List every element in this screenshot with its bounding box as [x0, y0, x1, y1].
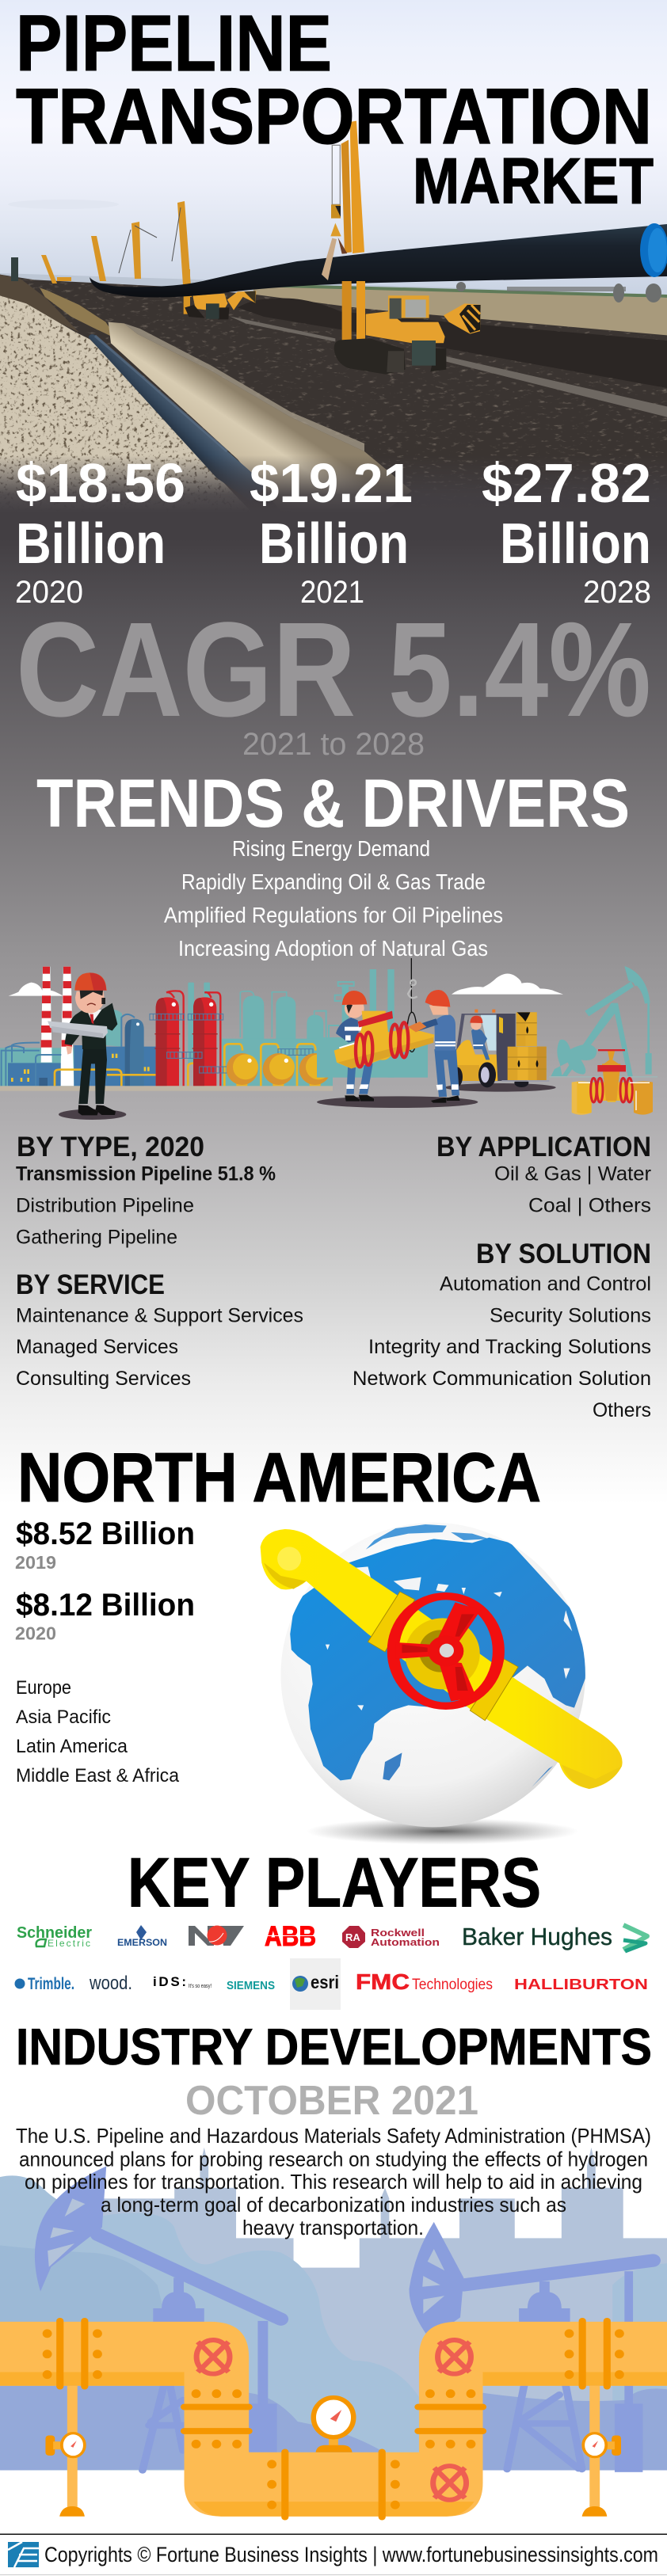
- hills: [0, 2175, 425, 2471]
- yellow pipeline: [0, 2322, 667, 2517]
- other regions list: Middle East & Africa: [16, 1765, 180, 1786]
- trench pipe: [89, 334, 267, 501]
- stat 2021: [250, 452, 413, 610]
- title: [16, 0, 654, 217]
- spheres: [227, 1053, 331, 1086]
- regional values: [15, 1516, 195, 1644]
- logo: Trimble: Trimble.: [28, 1975, 74, 1993]
- segment: by application: [436, 1132, 651, 1216]
- icon: Fortune Business Insights logo: [8, 2542, 39, 2567]
- logo: iDS: [153, 1974, 212, 1989]
- gravel bank: [0, 295, 261, 523]
- segment: by solution: Automation and Control: [440, 1273, 651, 1296]
- yellow pipe: [261, 1529, 623, 1789]
- regional values: $8.12 Billion: [16, 1588, 195, 1623]
- logo: Wood: wood.: [89, 1973, 132, 1994]
- logo: Rockwell Automation: Rockwell: [371, 1927, 425, 1939]
- other regions list: Europe: [16, 1677, 71, 1699]
- logo: FMC Technologies: Technologies: [412, 1977, 493, 1993]
- red valves: [196, 2340, 471, 2500]
- pipe blue end cap: [640, 223, 667, 277]
- main above-ground pipeline: [90, 224, 667, 298]
- flanges: [368, 1592, 518, 1721]
- segment: by solution: Others: [593, 1399, 651, 1421]
- stems and small gauges: [45, 2386, 621, 2517]
- segment: by type: [16, 1132, 276, 1248]
- segment: by solution: Security Solutions: [490, 1305, 651, 1327]
- trench wall: [109, 322, 412, 523]
- heading: north america: NORTH AMERICA: [17, 1438, 541, 1516]
- teal background structures: [0, 983, 333, 1086]
- pumpjack right: [410, 2222, 653, 2472]
- logos: [14, 1921, 648, 2010]
- logo: Esri: [290, 1958, 341, 2010]
- development text: a long-term goal of decarbonization industries such as: [101, 2193, 566, 2216]
- distant excavators: [41, 201, 192, 297]
- logo: Emerson: EMERSON: [117, 1937, 167, 1948]
- illustration: refinery left with engineer: [0, 967, 333, 1120]
- regional values: $8.52 Billion: [16, 1516, 195, 1551]
- illustration: pipeline and pumpjacks: [0, 2148, 667, 2517]
- stat 2020: [15, 452, 185, 610]
- railings: [150, 1014, 313, 1073]
- market size values: [15, 452, 651, 610]
- segment: by type: Transmission Pipeline 51.8 %: [16, 1162, 276, 1185]
- engineer: [48, 972, 126, 1120]
- logo: Halliburton: HALLIBURTON: [514, 1977, 648, 1992]
- segment: by application: Coal | Others: [528, 1194, 651, 1216]
- segment: by type: Distribution Pipeline: [16, 1194, 194, 1216]
- second pipelayer: [184, 269, 256, 319]
- worker one shadow: [317, 1096, 478, 1108]
- dry grass: [40, 287, 117, 339]
- worker two: [408, 990, 460, 1103]
- logo: Schneider Electric: Schneider: [17, 1924, 92, 1942]
- stat 2028: 2028: [583, 575, 651, 610]
- segment: by solution: Network Communication Solution: [353, 1368, 651, 1390]
- red tanks: [166, 991, 220, 1086]
- blue plant: [8, 1063, 61, 1086]
- logo: Emerson: [117, 1925, 167, 1948]
- logo: FMC Technologies: FMC: [356, 1969, 410, 1994]
- logo: NOV: [189, 1926, 244, 1946]
- illustration: workers with valve, forklift, pumpjack: [317, 958, 657, 1115]
- logo: Baker Hughes: Baker Hughes: [462, 1923, 612, 1950]
- forklift: [445, 1014, 556, 1092]
- fade into dark: [0, 455, 667, 527]
- stat 2020: $18.56: [16, 452, 185, 514]
- valve foreground right: [572, 1049, 653, 1115]
- stat 2020: Billion: [16, 512, 166, 576]
- drivers list: Rapidly Expanding Oil & Gas Trade: [181, 869, 486, 894]
- panel: construction photo: [0, 0, 667, 527]
- center gauge: [314, 2398, 353, 2452]
- drivers list: Rising Energy Demand: [232, 836, 430, 861]
- regional values: 2020: [15, 1623, 56, 1644]
- yellow pipes: [55, 1044, 315, 1086]
- logo: Rockwell Automation: Automation: [371, 1936, 440, 1948]
- date: OCTOBER 2021: [185, 2078, 478, 2124]
- segment: by type: BY TYPE, 2020: [17, 1132, 204, 1162]
- ground strip: [0, 1086, 333, 1091]
- far trees: [456, 282, 661, 302]
- pumpjack: [549, 966, 657, 1078]
- yellow valve assembly: [334, 1011, 434, 1068]
- main pipelayer: [322, 121, 481, 375]
- valve hub: [405, 1618, 480, 1689]
- segment: by service: [16, 1269, 303, 1390]
- segment: by service: BY SERVICE: [16, 1269, 165, 1300]
- development text: [16, 2124, 651, 2239]
- ground: soil, gravel, trench: [0, 275, 667, 523]
- logo: Esri: esri: [311, 1972, 339, 1992]
- stat 2021: 2021: [300, 575, 364, 610]
- logo: Trimble: [14, 1975, 74, 1993]
- drivers list: Amplified Regulations for Oil Pipelines: [164, 903, 503, 927]
- cloud: [9, 983, 63, 996]
- drivers list: Increasing Adoption of Natural Gas: [178, 936, 488, 961]
- development text: on pipelines for transportation. This research will help to aid in achieving: [25, 2170, 642, 2194]
- regional values: 2019: [15, 1552, 56, 1573]
- hook: [407, 958, 417, 1052]
- segment: by solution: BY SOLUTION: [476, 1239, 651, 1269]
- logo: Schneider Electric: Electric: [48, 1938, 90, 1949]
- cloud: [452, 974, 563, 995]
- logo: ABB: ABB: [265, 1921, 316, 1952]
- upper left bank: [0, 275, 79, 333]
- segment: by service: Managed Services: [16, 1336, 178, 1358]
- logo: iDS: iDS:: [153, 1974, 186, 1989]
- logo: Rockwell Automation: RA: [345, 1931, 360, 1943]
- worker one: [336, 991, 374, 1102]
- logo: Siemens: SIEMENS: [227, 1979, 275, 1992]
- heading: key players: KEY PLAYERS: [128, 1844, 541, 1921]
- segment: by solution: [353, 1239, 651, 1421]
- stat 2021: $19.21: [250, 452, 413, 514]
- other regions list: Latin America: [16, 1736, 128, 1757]
- city silhouette: [0, 2148, 667, 2471]
- red wheel: [393, 1596, 498, 1706]
- segment: by solution: Integrity and Tracking Solutions: [368, 1336, 651, 1358]
- chimneys: [41, 967, 52, 1063]
- segment: by type: Gathering Pipeline: [16, 1226, 177, 1248]
- segment: by service: Consulting Services: [16, 1368, 191, 1390]
- CAGR period: 2021 to 2028: [242, 727, 425, 762]
- logo: FMC Technologies: [356, 1969, 493, 1994]
- barrels: [475, 1010, 547, 1080]
- stat 2021: Billion: [259, 512, 409, 576]
- drivers list: [164, 836, 503, 961]
- pumpjack left: [35, 2166, 280, 2471]
- segment: by service: Maintenance & Support Services: [16, 1305, 303, 1327]
- segment: by application: Oil & Gas | Water: [494, 1162, 651, 1185]
- segment: by application: BY APPLICATION: [436, 1132, 651, 1162]
- stat 2020: 2020: [15, 575, 83, 610]
- other regions list: [16, 1677, 180, 1786]
- footer: [0, 2522, 667, 2576]
- other regions list: Asia Pacific: [16, 1707, 111, 1728]
- development text: heavy transportation.: [242, 2216, 424, 2239]
- logo: Rockwell Automation: [342, 1926, 440, 1948]
- stat 2028: [482, 452, 651, 610]
- title: PIPELINE: [16, 0, 332, 88]
- stat 2028: $27.82: [482, 452, 651, 514]
- icon: globe with pipe valve: [261, 1523, 623, 1844]
- logo: iDS: It's so easy!: [189, 1984, 212, 1989]
